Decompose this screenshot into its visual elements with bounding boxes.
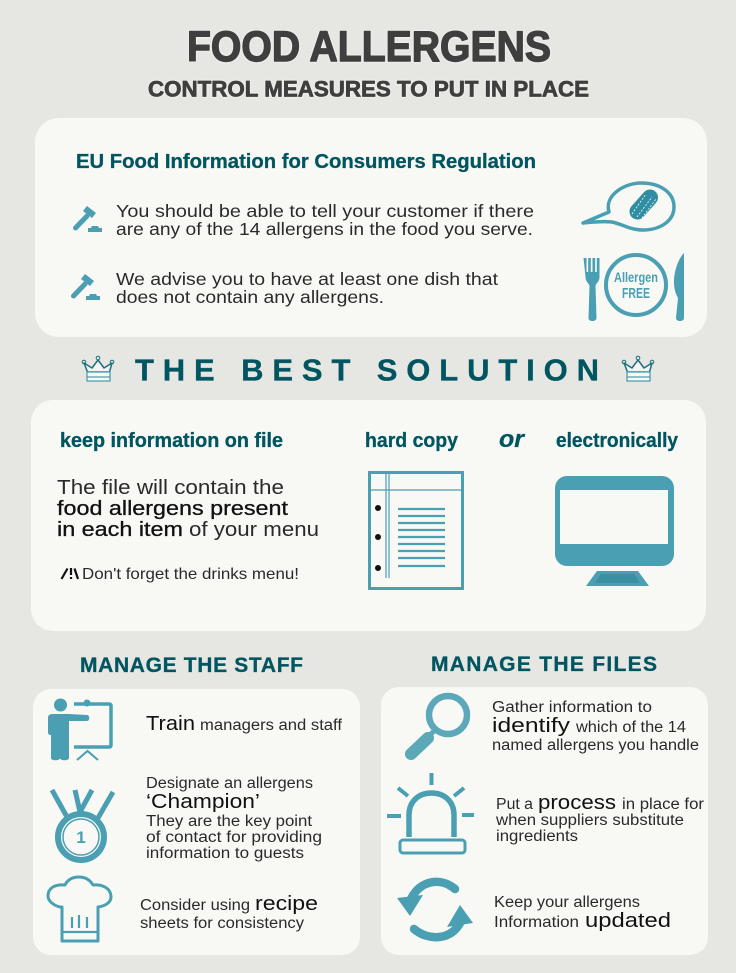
heading: electronically: electronically (556, 430, 679, 452)
text: process: Put a (496, 796, 533, 813)
heading: manage the staff: MANAGE THE STAFF (80, 654, 303, 677)
icon: gavel 1 (76, 206, 102, 232)
icon: warning (62, 568, 78, 579)
text: process (495, 792, 704, 845)
icon: trainer at board (48, 698, 111, 760)
icon: chef hat (48, 877, 111, 941)
panel: manage the files (381, 687, 708, 955)
text: identify: Gather information to (492, 699, 652, 716)
text: train: managers and staff (200, 717, 343, 734)
panel: manage the staff (33, 689, 360, 955)
text: champion: Designate an allergens (146, 775, 313, 792)
text: champion: of contact for providing (146, 829, 322, 846)
icon: hard copy document (370, 472, 462, 588)
text: train: Train (146, 713, 195, 735)
icon: plate, fork and knife (584, 253, 684, 321)
text: identify (492, 699, 699, 754)
text: file contents: food allergens present (57, 498, 289, 520)
text: updated: updated (585, 910, 671, 932)
icon: medal (52, 790, 113, 860)
icon: speech bubble with peanut (583, 183, 674, 230)
text: updated: Keep your allergens (494, 894, 640, 911)
text: allergen-free dish (116, 269, 498, 307)
text: recipe sheets: recipe (255, 893, 318, 915)
icon: alarm light (387, 773, 474, 853)
text: customer allergens: You should be able to tell your customer if there (116, 201, 534, 221)
text: champion: ‘Champion’ (146, 791, 260, 813)
text: customer allergens (116, 201, 534, 239)
icon: gavel 2 (74, 274, 100, 300)
text: process: ingredients (496, 828, 578, 845)
panel: best solution (31, 400, 706, 631)
text: champion: They are the key point (146, 813, 313, 830)
text: updated: Information (494, 914, 579, 931)
subtitle: CONTROL MEASURES TO PUT IN PLACE (148, 76, 589, 102)
text: recipe sheets: sheets for consistency (140, 915, 304, 932)
text: drinks menu reminder: Don't forget the drinks menu! (82, 566, 299, 583)
text: allergen-free dish: does not contain any allergens. (116, 287, 384, 307)
text: updated (494, 894, 671, 932)
icon: crown right (622, 356, 654, 381)
text: train (146, 713, 343, 735)
icon: computer monitor (555, 476, 674, 586)
text: champion (146, 775, 322, 862)
icon: medal: 1 (76, 828, 86, 847)
heading: or: or (499, 426, 526, 453)
icon: plate, fork and knife: Allergen (614, 270, 658, 285)
heading: the best solution: THE BEST SOLUTION (135, 352, 599, 388)
text: process: process (538, 792, 616, 814)
title: FOOD ALLERGENS (187, 23, 551, 71)
heading: hard copy: hard copy (365, 430, 459, 452)
icon: refresh arrows (397, 882, 473, 937)
heading: EU regulation: EU Food Information for Consumers Regulation (76, 151, 536, 173)
heading: keep information on file: keep information on file (60, 430, 283, 452)
text: file contents: of your menu (189, 519, 319, 541)
text: recipe sheets (140, 893, 318, 932)
icon: plate, fork and knife: FREE (622, 286, 650, 302)
text: identify: named allergens you handle (492, 737, 699, 754)
icon: crown left (82, 356, 114, 381)
text: identify: which of the 14 (575, 719, 686, 736)
text: process: when suppliers substitute (495, 812, 684, 829)
text: champion: information to guests (146, 845, 304, 862)
text: process: in place for (622, 796, 704, 813)
icon: magnifying glass (411, 696, 467, 754)
text: identify: identify (492, 715, 570, 737)
text: file contents (57, 477, 319, 541)
panel: EU regulation (35, 118, 707, 337)
text: allergen-free dish: We advise you to have at least one dish that (116, 269, 498, 289)
text: file contents: in each item (57, 519, 183, 541)
text: recipe sheets: Consider using (140, 897, 250, 914)
text: file contents: The file will contain the (57, 477, 284, 499)
text: customer allergens: are any of the 14 allergens in the food you serve. (116, 219, 533, 239)
heading: manage the files: MANAGE THE FILES (431, 653, 657, 676)
